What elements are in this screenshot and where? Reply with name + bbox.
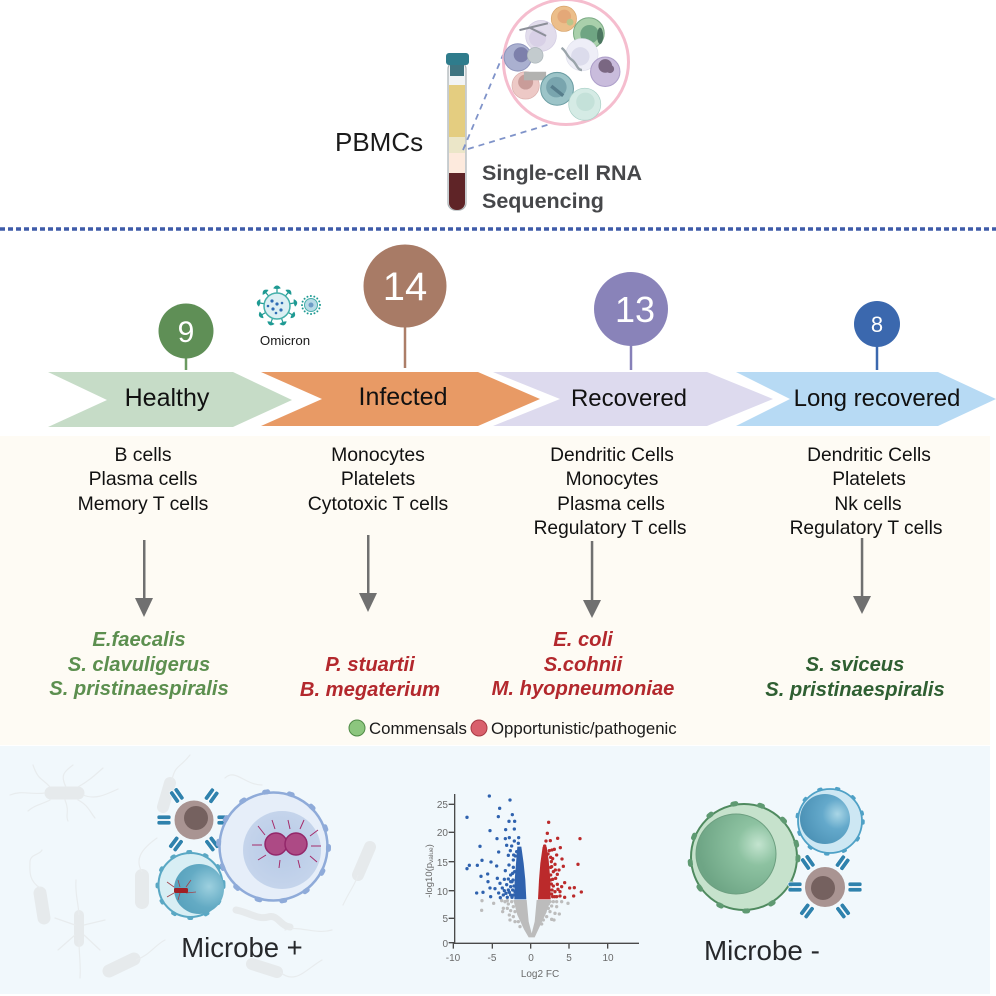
stage: Recovered: 13: [615, 289, 655, 330]
legend: [349, 719, 677, 738]
cell: plasma cell, Microbe +: [157, 787, 231, 853]
stage: Long recovered: Long recovered: [794, 385, 960, 412]
column: Infected cell types: Monocytes: [331, 444, 425, 466]
cell: small infected cell: [158, 852, 224, 918]
stage: Recovered: [493, 272, 773, 426]
icon: Omicron virus: Omicron: [260, 333, 310, 348]
species: Healthy: [49, 629, 229, 700]
label: Single-cell RNA Sequencing: [482, 161, 642, 213]
arrow: Long recovered: [853, 538, 871, 614]
arrow: Healthy: [135, 540, 153, 617]
volcano plot: 0: [442, 939, 448, 950]
volcano plot: 25: [437, 800, 448, 811]
volcano plot: 0: [528, 953, 534, 964]
column: Long recovered cell types: Dendritic Cells: [807, 445, 931, 466]
column: Recovered cell types: Monocytes: [566, 469, 658, 490]
arrow: Infected: [359, 535, 377, 612]
column: Healthy cell types: B cells: [114, 444, 172, 466]
species: Long recovered: S. pristinaespiralis: [765, 679, 945, 701]
axes: [449, 794, 639, 949]
blue down-regulated points: [467, 796, 526, 899]
column: Long recovered cell types: Nk cells: [834, 494, 902, 515]
cell: large green cell: [690, 803, 798, 911]
column: Healthy cell types: [78, 444, 208, 515]
column: Recovered cell types: [534, 445, 686, 539]
column: Long recovered cell types: Regulatory T cells: [790, 518, 942, 539]
icon: blood tube: [446, 53, 469, 210]
species: Long recovered: [765, 654, 945, 701]
volcano plot: 5: [566, 953, 572, 964]
species: Recovered: M. hyopneumoniae: [492, 678, 674, 700]
volcano plot: -10: [446, 953, 461, 964]
column: Long recovered cell types: [790, 445, 942, 539]
column: Recovered cell types: Plasma cells: [557, 494, 665, 515]
volcano plot: [424, 794, 639, 980]
gray non-significant points: [482, 900, 568, 937]
volcano plot: -log10(p: [424, 863, 435, 898]
panel: cell types and species: [0, 436, 990, 745]
volcano plot: 15: [437, 858, 448, 869]
volcano plot: 5: [442, 914, 448, 925]
species: Infected: P. stuartii: [325, 654, 415, 676]
label: Microbe +: Microbe +: [181, 932, 303, 963]
stage: Healthy: [48, 304, 292, 427]
column: Long recovered cell types: Platelets: [832, 469, 906, 490]
legend: Commensals: [369, 719, 467, 738]
stage: Long recovered: 8: [871, 312, 883, 337]
species: Healthy: E.faecalis: [92, 629, 186, 651]
species: Healthy: S. pristinaespiralis: [49, 678, 229, 700]
cell: plasma cell, Microbe -: [788, 854, 862, 920]
volcano plot: -5: [488, 953, 497, 964]
volcano plot: value: [428, 847, 435, 863]
label: Single-cell RNA Sequencing: Single-cell RNA: [482, 161, 642, 185]
species: Recovered: E. coli: [553, 629, 613, 651]
label: PBMCs: PBMCs: [335, 127, 423, 157]
column: Healthy cell types: Plasma cells: [89, 468, 197, 490]
volcano plot: 20: [437, 828, 448, 839]
species: Infected: [300, 654, 440, 701]
column: Recovered cell types: Dendritic Cells: [550, 445, 674, 466]
stage: Infected: 14: [383, 265, 427, 309]
stage: Healthy: Healthy: [125, 384, 210, 412]
species: Recovered: S.cohnii: [544, 654, 623, 676]
column: Infected cell types: [308, 444, 448, 515]
label: Single-cell RNA Sequencing: Sequencing: [482, 189, 604, 213]
background: faint bacteria: [10, 755, 370, 978]
column: Infected cell types: Cytotoxic T cells: [308, 493, 448, 515]
column: Healthy cell types: Memory T cells: [78, 493, 208, 515]
cell: large infected cell: [218, 792, 328, 902]
arrow: Recovered: [583, 541, 601, 618]
stage: Healthy: 9: [178, 316, 194, 349]
stage: Recovered: Recovered: [571, 385, 687, 412]
column: Recovered cell types: Regulatory T cells: [534, 518, 686, 539]
icon: PBMC cell magnifier: [463, 0, 628, 150]
column: Infected cell types: Platelets: [341, 468, 415, 490]
stage: Long recovered: [736, 301, 996, 426]
legend: Opportunistic/pathogenic: [491, 719, 677, 738]
species: Infected: B. megaterium: [300, 679, 440, 701]
species: Recovered: [492, 629, 674, 700]
red up-regulated points: [538, 822, 581, 899]
species: Healthy: S. clavuligerus: [68, 654, 210, 676]
volcano plot: 10: [437, 887, 448, 898]
volcano plot: 10: [602, 953, 614, 964]
panel: differential expression: [0, 746, 990, 994]
label: Microbe -: Microbe -: [704, 935, 820, 966]
icon: Omicron virus: [257, 286, 320, 348]
species: Long recovered: S. sviceus: [806, 654, 904, 676]
volcano plot: ): [424, 844, 435, 847]
cell: blue cell: [797, 788, 863, 854]
stage: Infected: [261, 244, 540, 426]
stage: Infected: Infected: [359, 383, 447, 411]
volcano plot: Log2 FC: [521, 969, 559, 980]
